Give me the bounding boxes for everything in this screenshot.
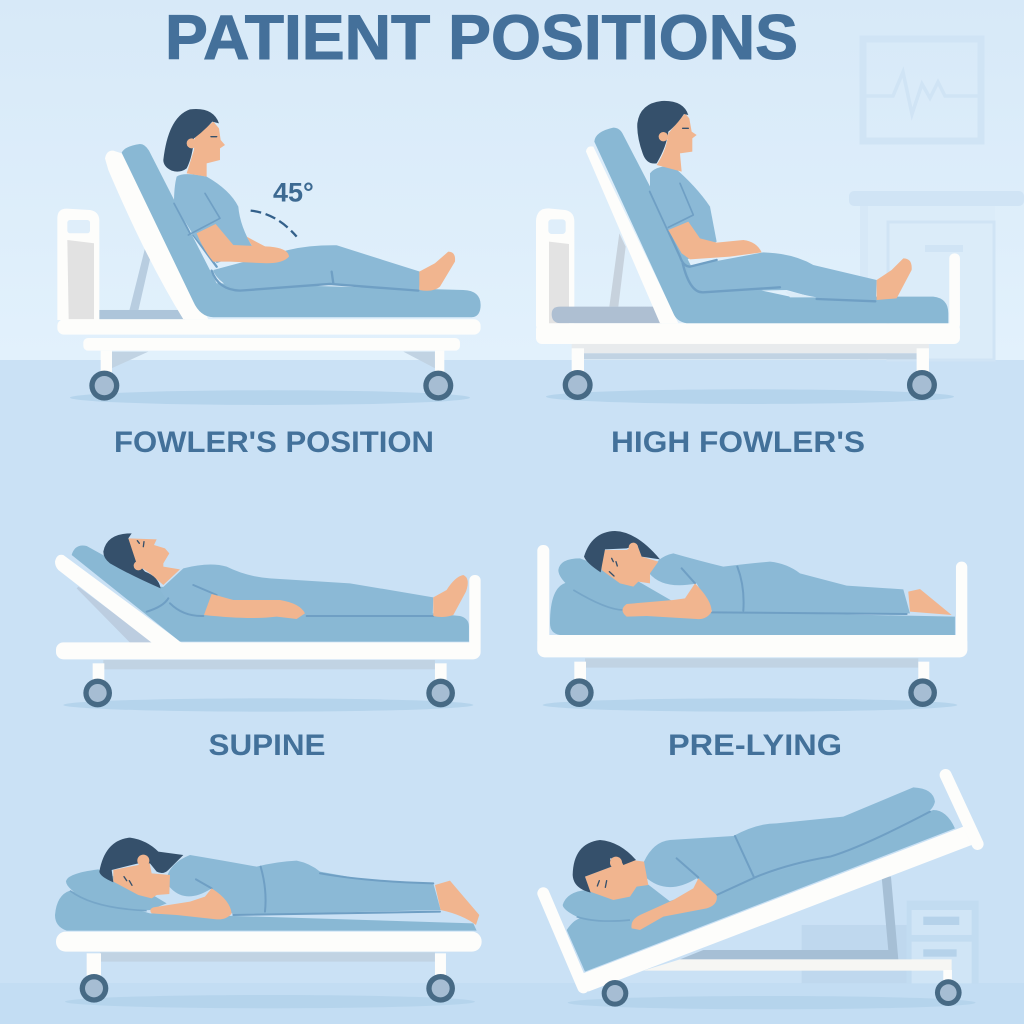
angle label 45 degrees: 45°	[273, 178, 314, 208]
tilted bed frame	[543, 775, 978, 1007]
patient	[103, 533, 468, 619]
patient	[99, 838, 479, 925]
label: Supine: SUPINE	[208, 729, 326, 762]
title: PATIENT POSITIONS	[165, 3, 798, 73]
tilted mattress and pillow	[563, 810, 955, 972]
label: High Fowler's: HIGH FOWLER'S	[611, 426, 865, 459]
bed frame	[57, 151, 481, 401]
floor shadow	[65, 995, 475, 1008]
patient	[637, 101, 912, 301]
angle label 45 degrees	[251, 178, 314, 237]
panel: High Fowler's	[536, 101, 960, 404]
panel: Fowler's position	[57, 109, 481, 405]
floor shadow	[70, 390, 470, 405]
mattress	[594, 128, 948, 323]
label: Pre-lying: PRE-LYING	[668, 729, 842, 762]
floor shadow	[63, 698, 473, 712]
panel: Pre-lying	[537, 531, 967, 712]
bed frame	[537, 545, 967, 707]
label: Fowler's position: FOWLER'S POSITION	[114, 426, 434, 459]
bedside cabinet	[849, 191, 1024, 360]
patient	[573, 787, 935, 930]
floor shadow	[546, 389, 954, 404]
wall monitor icon	[863, 39, 981, 141]
mattress	[122, 144, 481, 317]
patient	[584, 531, 952, 619]
panel: Supine	[55, 533, 481, 712]
background drawers and box	[802, 901, 979, 983]
patient	[163, 109, 455, 291]
mattress and pillow	[550, 558, 955, 635]
panel: Trendelenburg	[543, 775, 979, 1009]
panel: Prone	[55, 838, 482, 1008]
bed frame	[55, 555, 481, 707]
mattress and pillow	[72, 546, 469, 642]
bed frame	[56, 932, 482, 1003]
floor shadow	[568, 996, 976, 1009]
mattress and pillow	[55, 869, 477, 931]
bed frame	[536, 146, 960, 400]
floor shadow	[543, 698, 957, 712]
